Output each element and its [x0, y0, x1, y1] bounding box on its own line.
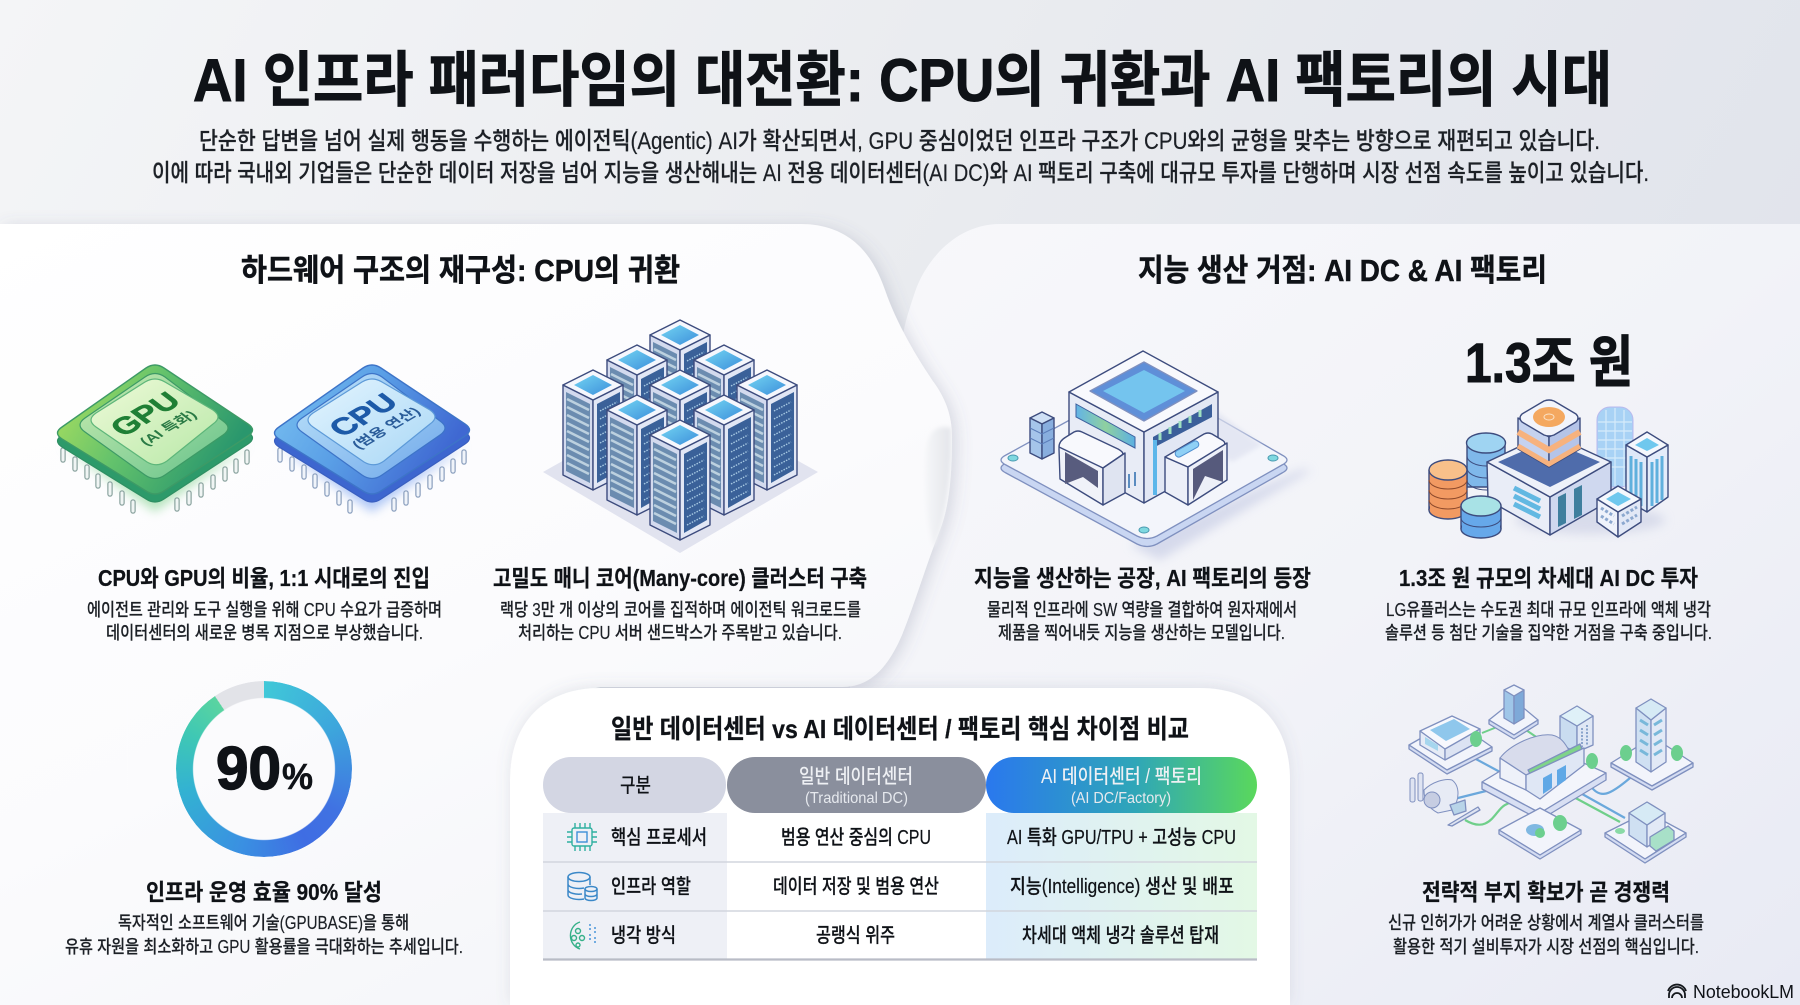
table rows background [543, 813, 1257, 960]
card text: AI factory: 지능을 생산하는 공장, AI 팩토리의 등장 [974, 565, 1311, 591]
card text: efficiency: 독자적인 소프트웨어 기술(GPUBASE)을 통해 [118, 913, 409, 933]
card text: AI factory: 물리적 인프라에 SW 역량을 결합하여 원자재에서 [987, 600, 1297, 620]
title: AI 인프라 패러다임의 대전환: CPU의 귀환과 AI 팩토리의 시대 [193, 47, 1612, 114]
row label: cooling: 냉각 방식 [611, 924, 676, 947]
cell: traditional role: 데이터 저장 및 범용 연산 [773, 875, 939, 898]
illustration: strategic sites network [1409, 685, 1693, 863]
cell: AI cooling: 차세대 액체 냉각 솔루션 탑재 [1022, 924, 1219, 947]
notch shadow on left panel edge [925, 427, 951, 548]
card text: efficiency [65, 879, 463, 957]
cell: traditional processor: 범용 연산 중심의 CPU [781, 826, 931, 849]
donut chart: 90%: 90 [216, 735, 281, 802]
big number: 1.3조 원: 1.3조 원 [1465, 331, 1633, 394]
icon: CPU chip: (범용 연산) [349, 405, 424, 452]
header: AI DC: (AI DC/Factory) [1071, 790, 1171, 807]
header: traditional DC: 일반 데이터센터 [799, 765, 913, 788]
cell: AI role: 지능(Intelligence) 생산 및 배포 [1010, 875, 1234, 898]
card text: CPU GPU ratio [87, 565, 442, 643]
illustration: AI factory [1001, 351, 1312, 560]
icon: GPU chip: GPU [104, 388, 188, 441]
card text: strategic site: 전략적 부지 확보가 곧 경쟁력 [1422, 879, 1670, 905]
icon: cooling [570, 922, 595, 949]
icon: GPU chip: (AI 특화) [136, 408, 201, 448]
row label: processor: 핵심 프로세서 [611, 826, 707, 849]
heading: intelligence section: 지능 생산 거점: AI DC & AI 팩토리 [1138, 253, 1547, 288]
card text: investment: 솔루션 등 첨단 기술을 집약한 거점을 구축 중입니다. [1385, 623, 1712, 643]
panel: right section background [850, 224, 1800, 1005]
header: traditional DC: (Traditional DC) [805, 790, 908, 807]
card text: strategic site: 신규 인허가가 어려운 상황에서 계열사 클러스터를 [1388, 913, 1704, 933]
card text: many-core cluster [493, 565, 867, 643]
icon: database [568, 872, 597, 900]
header: category [543, 757, 726, 813]
row label: role: 인프라 역할 [611, 875, 691, 898]
panel: left section background [0, 224, 952, 1005]
icon: GPU chip [58, 365, 252, 512]
table heading: 일반 데이터센터 vs AI 데이터센터 / 팩토리 핵심 차이점 비교 [611, 714, 1189, 744]
card text: investment: LG유플러스는 수도권 최대 규모 인프라에 액체 냉각 [1386, 600, 1711, 620]
panel: comparison table [510, 688, 1290, 1005]
illustration: investment data center [1429, 400, 1668, 538]
card text: CPU GPU ratio: 데이터센터의 새로운 병목 지점으로 부상했습니다. [106, 623, 423, 643]
heading: hardware section: 하드웨어 구조의 재구성: CPU의 귀환 [241, 253, 680, 288]
card text: strategic site: 활용한 적기 설비투자가 시장 선점의 핵심입니다. [1393, 937, 1699, 957]
header: category: 구분 [620, 775, 651, 797]
subtitle text: 단순한 답변을 넘어 실제 행동을 수행하는 에이전틱(Agentic) AI가 확산되면서, GPU 중심이었던 인프라 구조가 CPU와의 균형을 맞추는 방향으로 재편되고 있습니다. [199, 128, 1600, 155]
card text: strategic site [1388, 879, 1704, 957]
card text: investment: 1.3조 원 규모의 차세대 AI DC 투자 [1399, 565, 1698, 591]
illustration: server cluster [543, 320, 818, 553]
icon: processor [567, 823, 597, 851]
card text: AI factory: 제품을 찍어내듯 지능을 생산하는 모델입니다. [998, 623, 1285, 643]
NotebookLM logo: NotebookLM [1693, 982, 1794, 1002]
donut chart: 90% [176, 681, 352, 857]
card text: AI factory [974, 565, 1311, 643]
card text: CPU GPU ratio: 에이전트 관리와 도구 실행을 위해 CPU 수요가 급증하며 [87, 600, 442, 620]
card text: efficiency: 인프라 운영 효율 90% 달성 [146, 879, 382, 905]
cell: traditional cooling: 공랭식 위주 [816, 924, 895, 947]
header: AI DC: AI 데이터센터 / 팩토리 [1041, 765, 1202, 788]
subtitle text [152, 128, 1649, 187]
card text: CPU GPU ratio: CPU와 GPU의 비율, 1:1 시대로의 진입 [98, 565, 430, 591]
icon: CPU chip [274, 365, 470, 512]
card text: investment [1385, 565, 1712, 643]
card text: many-core cluster: 처리하는 CPU 서버 샌드박스가 주목받고 있습니다. [518, 623, 842, 643]
card text: many-core cluster: 랙당 3만 개 이상의 코어를 집적하며 에이전틱 워크로드를 [500, 600, 861, 620]
card text: many-core cluster: 고밀도 매니 코어(Many-core) 클러스터 구축 [493, 565, 867, 591]
cell: AI processor: AI 특화 GPU/TPU + 고성능 CPU [1007, 826, 1236, 849]
donut chart: 90%: % [282, 756, 313, 797]
header: AI DC [986, 757, 1257, 813]
icon: CPU chip: CPU [323, 389, 405, 442]
card text: efficiency: 유휴 자원을 최소화하고 GPU 활용률을 극대화하는 추세입니다. [65, 937, 463, 957]
header: traditional DC [727, 757, 986, 813]
